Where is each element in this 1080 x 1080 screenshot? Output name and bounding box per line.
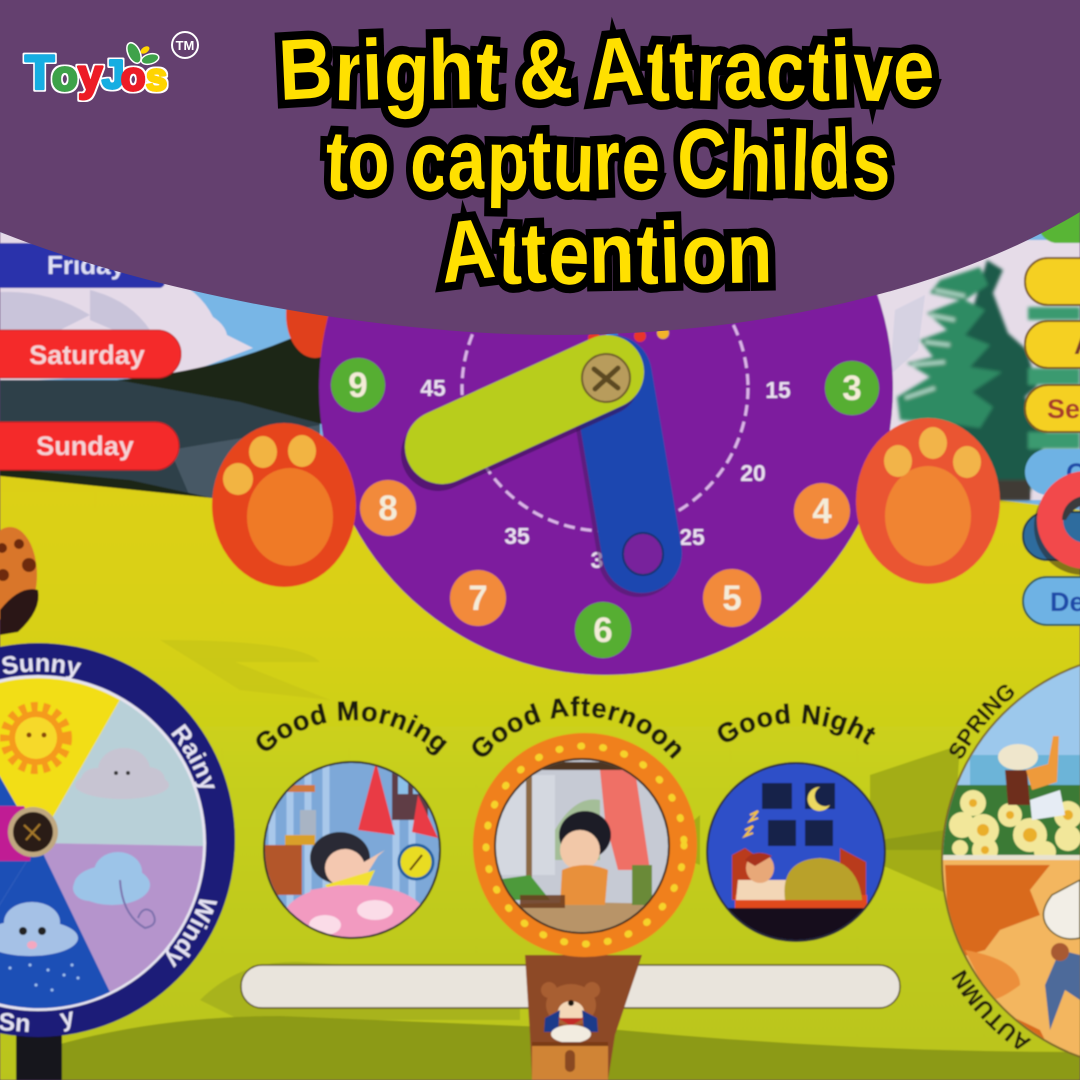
wheel labels: y — [57, 1003, 77, 1033]
seasons wheel: SPRING — [948, 684, 1015, 760]
minute numbers: 25 — [679, 524, 705, 550]
wheel screw — [8, 807, 58, 857]
good night scene — [705, 702, 887, 943]
hour 7: 7 — [468, 579, 488, 618]
right paw — [856, 418, 1000, 584]
minute numbers: 3 — [591, 547, 603, 573]
clock screw — [582, 354, 630, 402]
logo leaves — [124, 40, 144, 66]
icon: snow cloud — [0, 902, 80, 992]
blue month pills — [1025, 449, 1080, 495]
time of day slider track — [241, 965, 900, 1008]
spotted paw piece left edge — [0, 527, 39, 635]
green piece top right — [1035, 204, 1080, 243]
pill: Saturday: Saturday — [29, 340, 145, 370]
yellow month pills — [1025, 258, 1080, 305]
month pills — [1023, 258, 1080, 625]
minute numbers: 15 — [765, 377, 791, 403]
sector: snowy — [0, 843, 110, 1008]
hour 4: 4 — [812, 492, 832, 531]
pill: Friday — [0, 243, 165, 288]
colour dots at twelve — [588, 327, 669, 344]
good afternoon scene: Good Afternoon — [471, 695, 682, 760]
blue minute hand — [609, 375, 663, 575]
hour 4 — [794, 483, 850, 539]
title: Bright & Attractive — [276, 19, 936, 121]
season labels — [961, 672, 1050, 761]
dashed minute ring — [462, 245, 748, 531]
weather wheel — [0, 642, 236, 1080]
wheel labels: Rainy — [170, 722, 216, 790]
red ear behind clock — [286, 272, 344, 358]
hour 5: 5 — [722, 579, 742, 618]
hour 8 — [360, 480, 416, 536]
hour 3 — [825, 361, 879, 415]
logo: Toyjos: y — [78, 51, 103, 100]
hour 5 — [703, 569, 761, 627]
orange dotted ring — [473, 733, 697, 957]
good morning scene — [256, 700, 448, 940]
good morning scene: Good Morning — [256, 700, 448, 756]
board background: yellow-green ground — [0, 476, 1080, 1080]
ground shadows — [40, 640, 1080, 1080]
magenta pointer — [0, 806, 32, 861]
good afternoon scene — [471, 695, 698, 1080]
pill: Friday: Friday — [47, 250, 126, 280]
left paw — [212, 423, 356, 587]
minute numbers: 45 — [420, 375, 446, 401]
clock face — [319, 101, 893, 675]
board background: sky, clouds and mountains — [0, 0, 1080, 520]
pill: Saturday — [0, 330, 181, 378]
green hour hand — [438, 372, 607, 454]
logo: Toyjos — [25, 32, 198, 100]
hour 8: 8 — [378, 489, 398, 528]
icon: sun — [7, 709, 65, 767]
pill: Sunday — [0, 422, 179, 470]
logo: Toyjos: TM — [176, 38, 194, 53]
title: to capture Childs — [324, 110, 893, 210]
wheel stick — [16, 1020, 62, 1080]
hour 6: 6 — [593, 611, 613, 650]
wheel labels: Sunny — [1, 654, 82, 679]
minute numbers: 35 — [504, 523, 530, 549]
white pointer — [1043, 880, 1080, 939]
sector: rainy — [38, 700, 203, 846]
minute numbers — [420, 375, 791, 573]
hour 9 — [331, 358, 385, 412]
logo: Toyjos: o — [52, 52, 78, 99]
logo: Toyjos: T — [25, 47, 54, 100]
hour 9: 9 — [348, 366, 368, 405]
month pills: Se — [1047, 394, 1080, 424]
seasons wheel: AUTUMN — [950, 969, 1032, 1050]
hour 3: 3 — [842, 369, 862, 408]
balloon bear basket — [525, 955, 642, 1080]
logo: Toyjos: s — [146, 57, 167, 99]
purple header shape — [0, 0, 1080, 335]
minute numbers: 20 — [740, 460, 766, 486]
pill: Sunday: Sunday — [36, 431, 134, 461]
pine tree — [897, 260, 1080, 500]
good night scene: Good Night — [716, 702, 876, 746]
icon: windy cloud — [73, 852, 155, 928]
hour 6 — [575, 602, 631, 658]
trademark badge — [172, 32, 198, 58]
logo: Toyjos: o — [121, 55, 145, 99]
icon: grey cloud — [75, 748, 169, 799]
title: Attention — [435, 201, 773, 303]
logo: Toyjos: J — [102, 53, 124, 97]
hour 7 — [450, 570, 506, 626]
wheel labels — [0, 654, 218, 1038]
seasons wheel — [940, 664, 1080, 1058]
day pills — [0, 243, 181, 470]
title — [276, 19, 936, 303]
sector: sunny — [0, 678, 120, 843]
hour numbers — [331, 358, 879, 658]
sector: windy — [38, 843, 203, 992]
wheel labels: Windy — [165, 898, 218, 969]
red ring marker — [1047, 484, 1080, 562]
